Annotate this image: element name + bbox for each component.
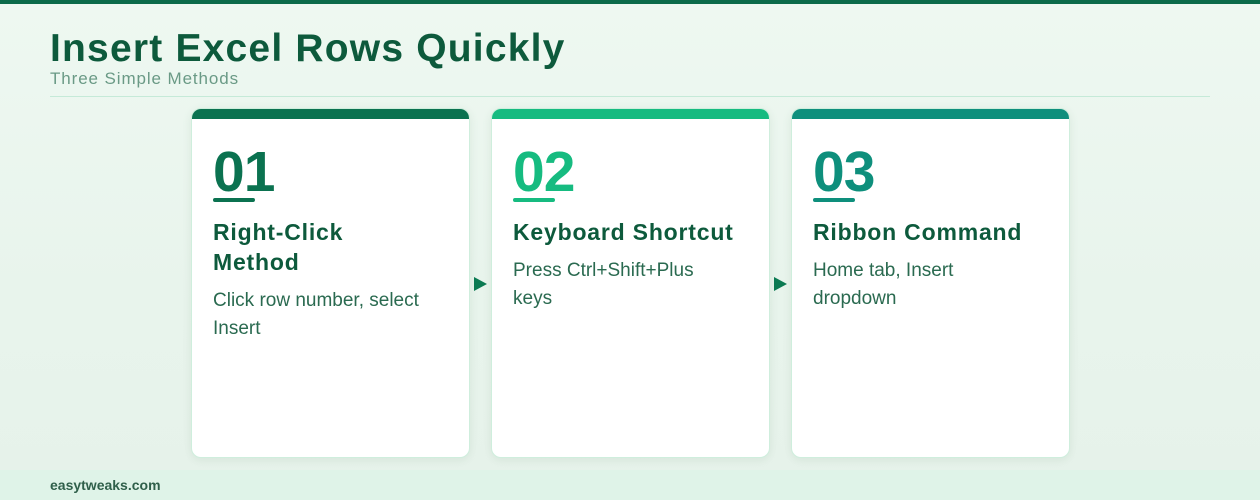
panel: card 02 <box>491 108 770 458</box>
number 02: 02 <box>513 140 574 204</box>
footer <box>0 470 1260 500</box>
subtitle: Three Simple Methods <box>50 69 239 88</box>
body text 2: keys <box>513 288 552 309</box>
title: Insert Excel Rows Quickly <box>50 27 566 70</box>
heading: right-click: Method <box>213 249 300 275</box>
heading: ribbon: Ribbon Command <box>813 219 1022 245</box>
number 01: 01 <box>213 140 274 204</box>
heading: right-click: Right-Click <box>213 219 343 245</box>
body text 2 <box>513 260 694 309</box>
heading: right-click <box>213 219 343 275</box>
footer: easytweaks.com <box>50 477 161 493</box>
body text 2: Press Ctrl+Shift+Plus <box>513 260 694 281</box>
panel: card 03 <box>791 108 1070 458</box>
arrow 1 <box>474 277 487 291</box>
panel: card 01 <box>191 108 470 458</box>
arrow 2 <box>774 277 787 291</box>
body text 1: Click row number, select Insert <box>213 290 419 339</box>
number 03: 03 <box>813 140 874 204</box>
heading: keyboard: Keyboard Shortcut <box>513 219 734 245</box>
body text 3: Home tab, Insert dropdown <box>813 260 953 309</box>
